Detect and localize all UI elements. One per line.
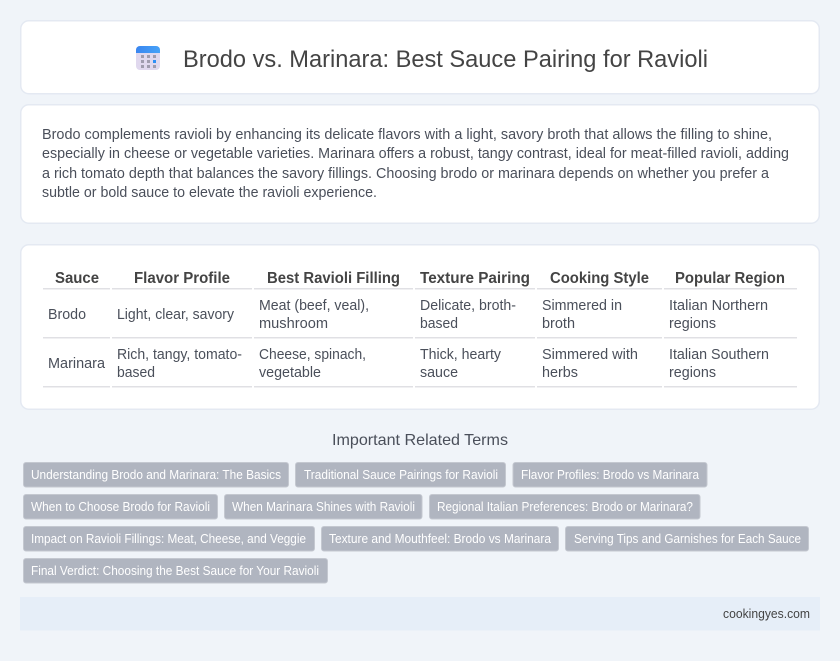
table row: Brodo: Italian Northern xyxy=(669,297,768,314)
table row: Brodo: regions xyxy=(669,315,716,332)
table row: Marinara: vegetable xyxy=(259,364,321,381)
table row: Marinara xyxy=(48,346,769,381)
table row: Marinara: herbs xyxy=(542,364,578,381)
table header row: Best Ravioli Filling xyxy=(267,270,400,287)
icon: calendar xyxy=(136,46,160,70)
footer: cookingyes.com xyxy=(723,607,810,621)
table row: Marinara: sauce xyxy=(420,364,458,381)
related term tags: Serving Tips and Garnishes for Each Sauce xyxy=(574,532,801,546)
table row: Brodo: Delicate, broth- xyxy=(420,297,516,314)
table row: Brodo: Meat (beef, veal), xyxy=(259,297,369,314)
table row: Marinara: Cheese, spinach, xyxy=(259,346,366,363)
table row: Brodo: Brodo xyxy=(48,306,86,323)
table header row: Cooking Style xyxy=(550,270,649,287)
panel: summary xyxy=(21,105,819,223)
panel: comparison table xyxy=(21,245,819,409)
table header row: Flavor Profile xyxy=(134,270,230,287)
heading: related terms: Important Related Terms xyxy=(332,432,508,449)
related term tags: Impact on Ravioli Fillings: Meat, Cheese, and Veggie xyxy=(31,532,306,546)
table row: Brodo: mushroom xyxy=(259,315,328,332)
table row: Marinara: Simmered with xyxy=(542,346,638,363)
table row: Marinara: Italian Southern xyxy=(669,346,769,363)
table row: Marinara: Marinara xyxy=(48,355,106,372)
related term tags: Regional Italian Preferences: Brodo or Marinara? xyxy=(437,500,693,514)
text block: summary paragraph xyxy=(42,126,789,201)
text block: summary paragraph: subtle or bold sauce to elevate the ravioli experience. xyxy=(42,184,377,201)
related term tags: Understanding Brodo and Marinara: The Basics xyxy=(31,468,281,482)
related term tags: Final Verdict: Choosing the Best Sauce for Your Ravioli xyxy=(31,564,319,578)
related term tags: When Marinara Shines with Ravioli xyxy=(232,500,415,514)
table row: Brodo: based xyxy=(420,315,458,332)
table header row xyxy=(55,270,785,287)
table header row: Sauce xyxy=(55,270,99,287)
panel: header xyxy=(21,21,819,94)
text block: summary paragraph: a rich tomato depth that balances the savory fillings. Choosing brodo or marinara depends on whether you prefer a xyxy=(42,165,770,182)
table row: Marinara: based xyxy=(117,364,155,381)
table row: Marinara: Rich, tangy, tomato- xyxy=(117,346,242,363)
table row: Brodo: broth xyxy=(542,315,575,332)
related term tags: Flavor Profiles: Brodo vs Marinara xyxy=(521,468,699,482)
title: Brodo vs. Marinara: Best Sauce Pairing for Ravioli xyxy=(183,46,708,73)
related term tags xyxy=(24,462,808,583)
table row: Brodo: Light, clear, savory xyxy=(117,306,234,323)
table header row: Texture Pairing xyxy=(420,270,530,287)
related term tags: When to Choose Brodo for Ravioli xyxy=(31,500,210,514)
related term tags: Traditional Sauce Pairings for Ravioli xyxy=(304,468,498,482)
related term tags: Texture and Mouthfeel: Brodo vs Marinara xyxy=(329,532,551,546)
table row: Marinara: Thick, hearty xyxy=(420,346,501,363)
text block: summary paragraph: especially in cheese or vegetable varieties. Marinara offers a robust, tangy contrast, ideal for meat-filled ravioli, adding xyxy=(42,145,789,162)
footer xyxy=(20,597,820,630)
text block: summary paragraph: Brodo complements ravioli by enhancing its delicate flavors with a light, savory broth that allows the filling to shine, xyxy=(42,126,772,143)
table row: Marinara: regions xyxy=(669,364,716,381)
table header row: Popular Region xyxy=(675,270,785,287)
table row: Brodo: Simmered in xyxy=(542,297,622,314)
table row: Brodo xyxy=(48,297,768,332)
